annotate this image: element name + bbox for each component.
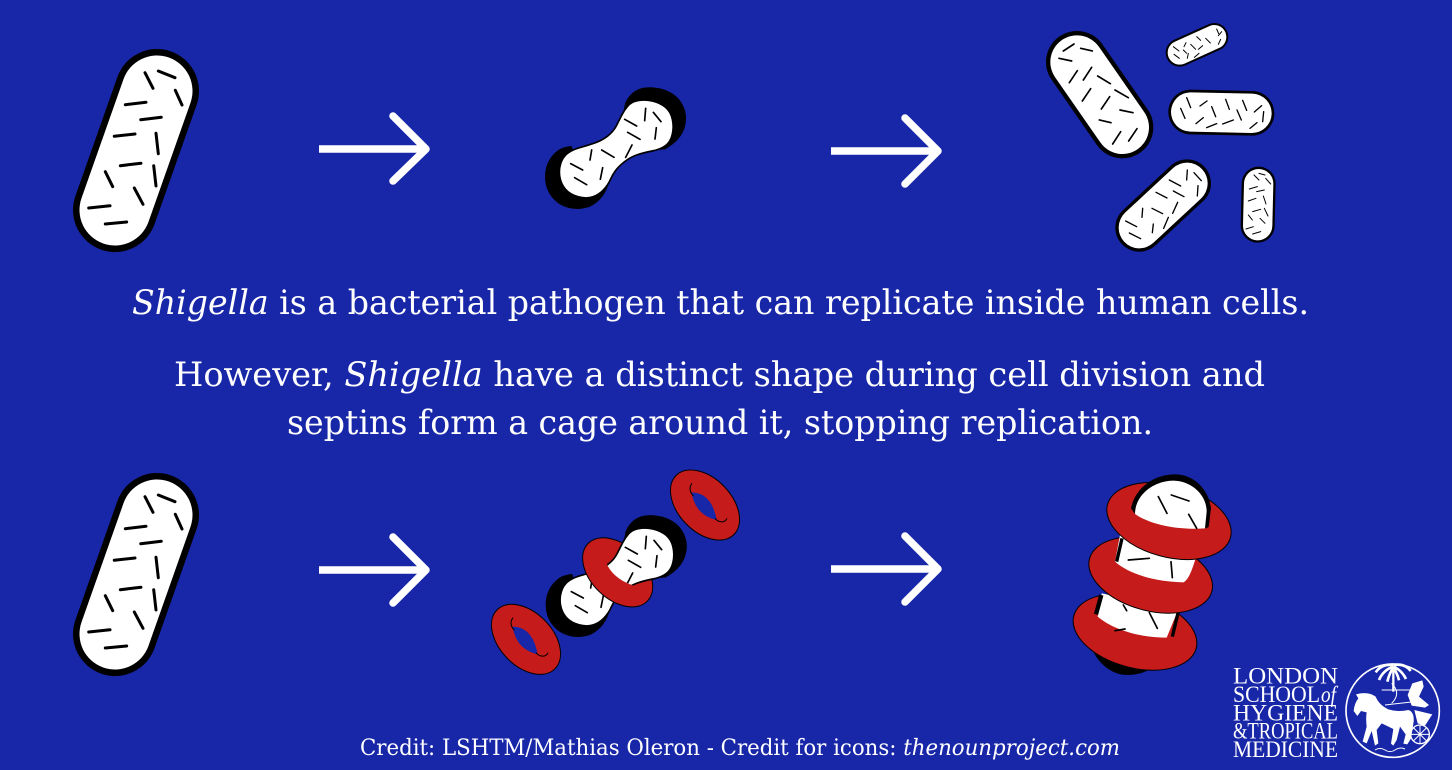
arrow: top right <box>831 118 938 184</box>
text: second sentence, line two: septins form a cage around it, stopping replication. <box>287 403 1153 443</box>
logo: LSHTM wordmark: HYGIENE <box>1233 700 1338 726</box>
text: second sentence, line one: However, Shigella have a distinct shape during cell division and <box>174 355 1265 395</box>
icon: bacterium top dome <box>1131 474 1211 529</box>
icon: bacterium 3 <box>1181 98 1264 128</box>
icon: large bacterium, top row <box>89 71 182 224</box>
icon: lower bacterium section <box>1096 593 1178 638</box>
logo: LSHTM wordmark <box>1233 664 1339 762</box>
icon: bacterium 1 <box>1059 44 1137 144</box>
logo: LSHTM wordmark: &TROPICAL <box>1233 718 1338 744</box>
icon: top right septin ring <box>657 457 753 553</box>
text: first sentence: Shigella is a bacterial pathogen that can replicate inside human cells. <box>132 283 1309 323</box>
logo: LSHTM wordmark: SCHOOL <box>1233 682 1320 707</box>
icon: bacterium caged by septin rings <box>1065 470 1240 683</box>
icon: dividing bacterium with septin rings <box>490 470 740 675</box>
logo: LSHTM wordmark: of <box>1321 682 1339 707</box>
icon: large bacterium, bottom row <box>89 495 182 648</box>
arrow: bottom right <box>831 536 938 602</box>
icon: dividing bacterium <box>546 515 687 637</box>
icon: lowest septin ring <box>1065 581 1205 683</box>
icon: upper half of bacterium through ring <box>606 515 687 586</box>
icon: top septin ring <box>1098 470 1240 572</box>
icon: bottom left septin ring <box>478 591 574 688</box>
icon: middle septin ring <box>1080 524 1221 626</box>
icon: bacterium 4 <box>1126 170 1201 239</box>
icon: group of replicated bacteria <box>1059 29 1271 239</box>
logo: LSHTM wordmark: MEDICINE <box>1233 737 1338 762</box>
icon: dividing bacterium, top row <box>545 87 686 209</box>
icon: central septin ring <box>569 524 666 620</box>
logo: LSHTM wordmark: LONDON <box>1233 664 1338 688</box>
arrow: bottom left <box>319 537 426 603</box>
text: credit line: Credit: LSHTM/Mathias Oleron - Credit for icons: thenounproject.com <box>360 736 1120 761</box>
arrow: top left <box>319 116 426 181</box>
icon: bacterium 2 <box>1173 29 1222 58</box>
icon: bacterium 5 <box>1246 173 1271 234</box>
icon: middle bacterium section <box>1115 535 1197 582</box>
logo: LSHTM seal with horse and chariot <box>1346 664 1439 757</box>
icon: bacterium bottom tip <box>1093 645 1158 675</box>
